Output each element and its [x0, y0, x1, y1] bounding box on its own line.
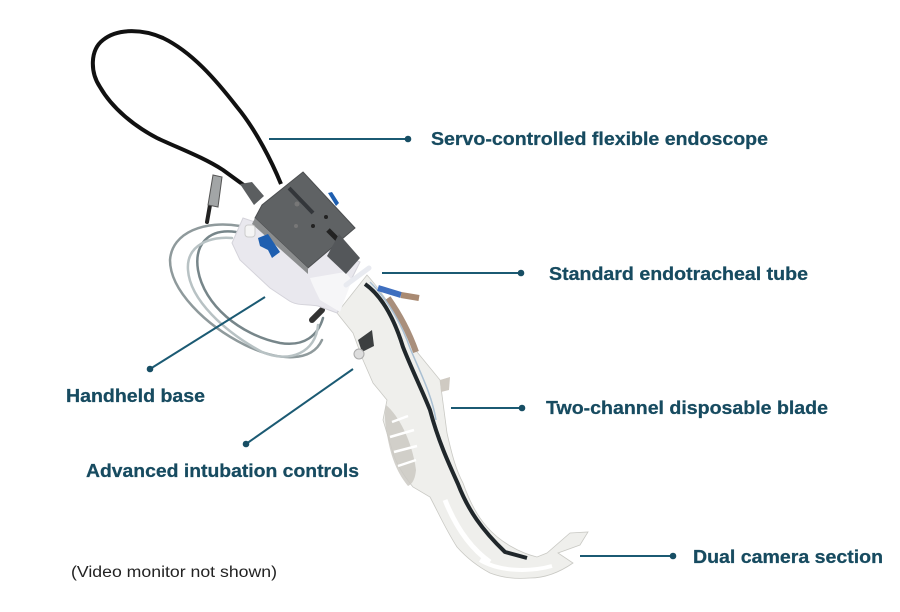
- white port: [245, 225, 255, 237]
- transparent blade: [337, 275, 588, 578]
- blue clips: [258, 234, 280, 258]
- label: advanced intubation controls: Advanced intubation controls: [86, 461, 359, 481]
- white tube collar: [346, 268, 369, 285]
- tan inner band: [388, 298, 416, 352]
- label: advanced intubation controls: [86, 369, 359, 481]
- label: standard endotracheal tube: Standard endotracheal tube: [549, 264, 808, 284]
- grey cable boot: [240, 182, 264, 205]
- grey wiring loops: [170, 205, 323, 357]
- label: servo-controlled flexible endoscope: Servo-controlled flexible endoscope: [431, 129, 768, 149]
- label: handheld base: [66, 297, 265, 406]
- note: video monitor: (Video monitor not shown): [71, 564, 277, 581]
- black endoscope cable loop: [93, 31, 281, 186]
- grey servo block: [255, 172, 355, 268]
- label: handheld base: Handheld base: [66, 386, 205, 406]
- label: two-channel disposable blade: Two-channel disposable blade: [546, 398, 828, 418]
- label: dual camera section: Dual camera section: [693, 547, 883, 567]
- blue tube connector: [378, 288, 401, 295]
- label: servo-controlled flexible endoscope: [269, 129, 768, 149]
- black channel stripe: [365, 284, 527, 558]
- round connector plug: [208, 175, 222, 207]
- control electronics: [358, 330, 374, 352]
- label: two-channel disposable blade: [451, 398, 828, 418]
- white handle base: [232, 218, 360, 313]
- label: standard endotracheal tube: [382, 264, 808, 284]
- label: dual camera section: [580, 547, 883, 567]
- device: robotic intubation system: [93, 31, 588, 578]
